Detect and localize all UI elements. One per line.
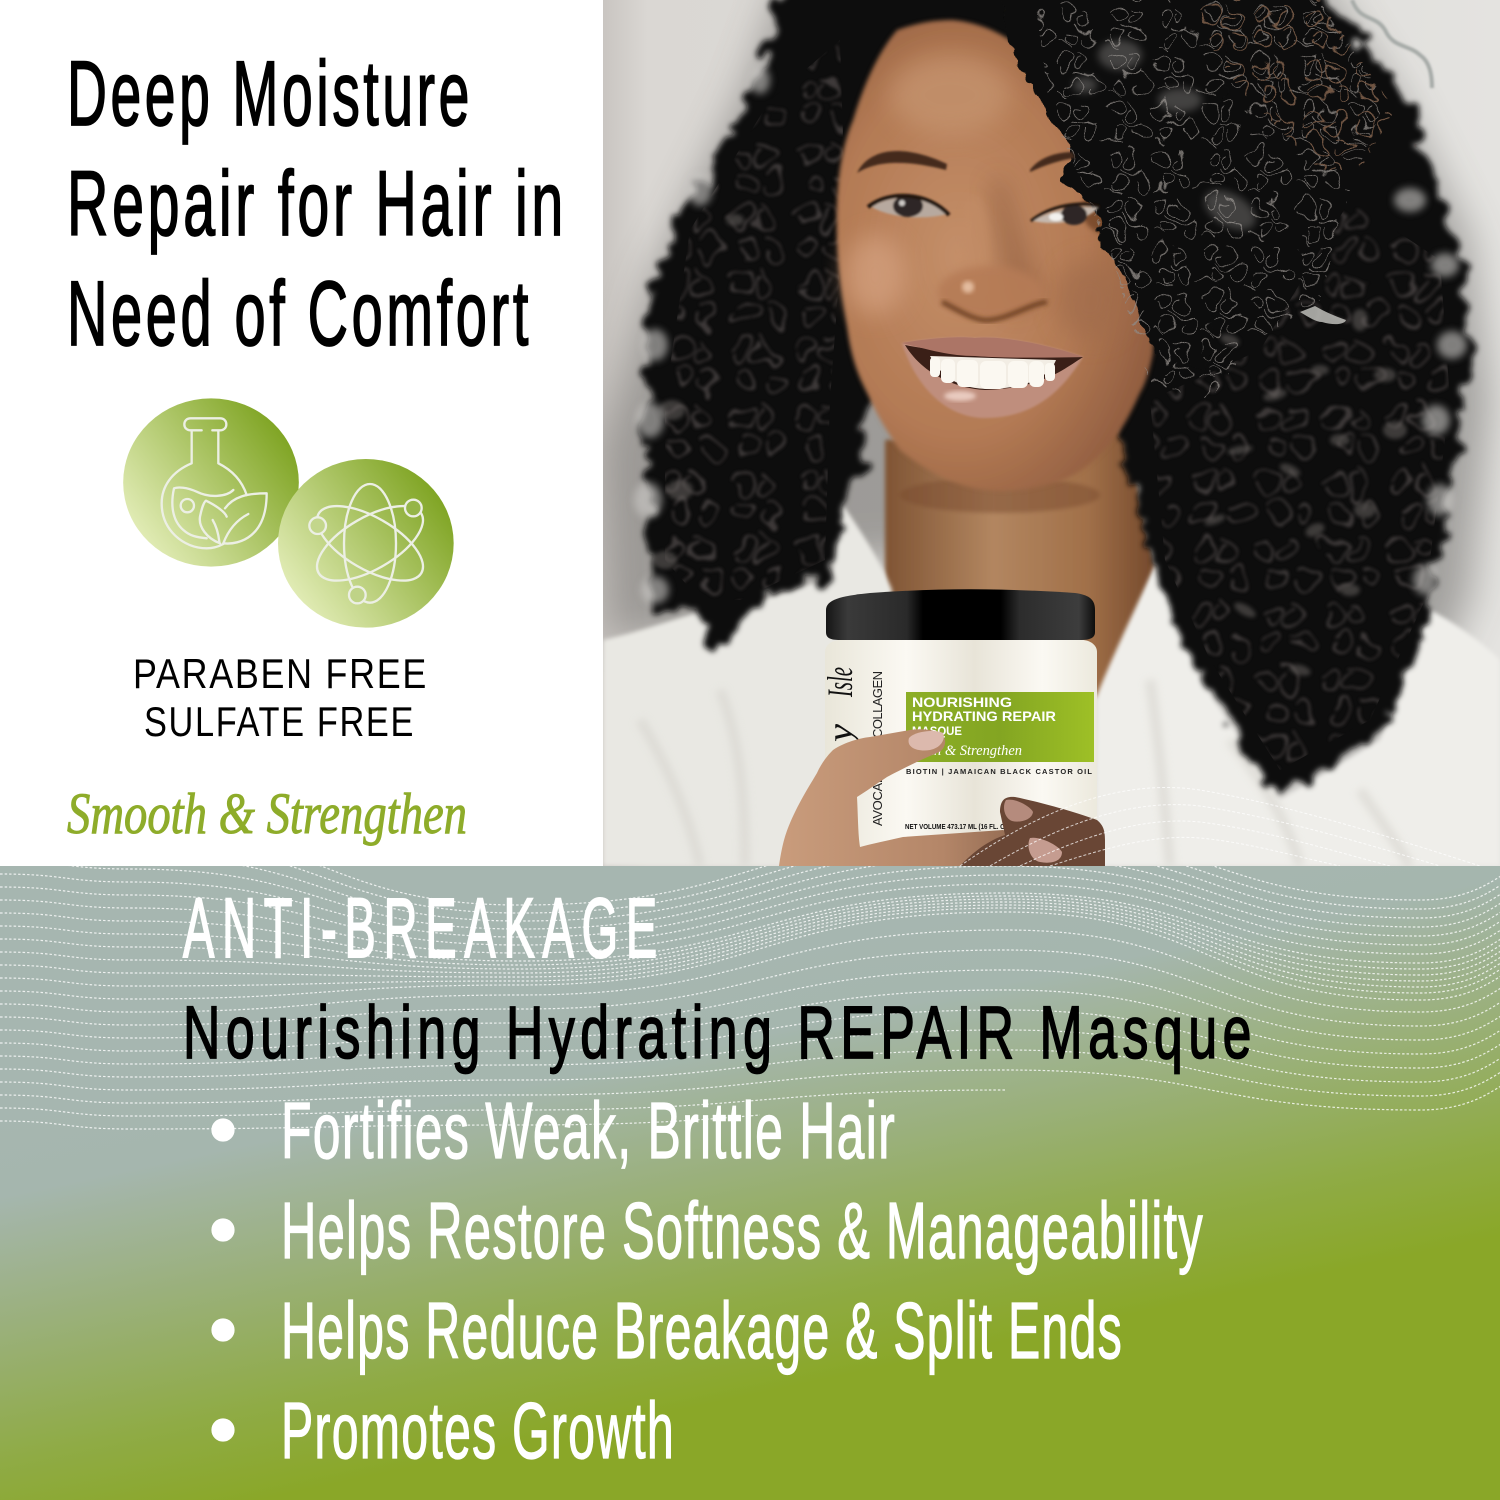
brown curls texture [1200, 0, 1392, 170]
jar green label: NOURISHING [912, 694, 1012, 710]
bullet 4 [212, 1386, 675, 1475]
bullet 1 [212, 1086, 896, 1175]
dim blurred curl texture [640, 30, 1470, 790]
smile [902, 337, 1083, 418]
icon: flask with leaves [123, 398, 299, 567]
flyaway curl [1352, 0, 1432, 88]
wave pattern [0, 866, 1500, 1130]
jar green label: th & Strengthen [930, 743, 1022, 759]
face [837, 20, 1160, 491]
jar lid [826, 589, 1095, 640]
heading [67, 43, 567, 365]
bullet 1: Fortifies Weak, Brittle Hair [281, 1086, 896, 1175]
jar body [825, 640, 1097, 848]
hair lock over face [1006, 34, 1163, 354]
jar net volume: NET VOLUME 473.17 ML (16 FL. O [905, 822, 1005, 831]
eyes [868, 195, 1100, 225]
bullet 3 [212, 1286, 1123, 1375]
fine curls texture [1036, 0, 1380, 398]
jar vertical text: Isle [820, 667, 860, 698]
grey highlights in hair [1073, 40, 1262, 238]
jar green label: MASQUE [912, 724, 962, 738]
jar vertical text: COLLAGEN [870, 671, 885, 738]
bottom gradient panel [0, 866, 1500, 1500]
left white panel [0, 0, 603, 866]
hair mass [644, 0, 1468, 797]
soft hair halo [603, 0, 1490, 790]
jar vertical text [827, 668, 882, 826]
nose [938, 267, 1049, 324]
product type heading: ANTI-BREAKAGE [183, 881, 665, 975]
jar ingredient line: BIOTIN | JAMAICAN BLACK CASTOR OIL [906, 767, 1092, 776]
icon: atom [278, 459, 454, 628]
bullet 4: Promotes Growth [281, 1386, 675, 1475]
heading: Repair for Hair in [67, 153, 567, 255]
hand holding jar [779, 729, 1105, 866]
jar vertical text: y [820, 724, 860, 745]
benefits list [212, 1086, 1204, 1475]
jar green label: HYDRATING REPAIR [912, 708, 1056, 724]
eyebrows [857, 151, 1075, 173]
dotted lines over robe [960, 787, 1480, 866]
neck and chest [885, 430, 1155, 700]
light gaps near outer hair [634, 66, 1467, 604]
claims: paraben and sulfate free: SULFATE FREE [144, 698, 415, 745]
heading: Need of Comfort [67, 263, 532, 365]
claims: paraben and sulfate free [133, 650, 428, 745]
claims: paraben and sulfate free: PARABEN FREE [133, 650, 428, 697]
blurred curls in lower hair [653, 214, 1407, 678]
robe folds [640, 680, 1410, 866]
small shiny curl [1300, 306, 1346, 324]
photo: woman with curly hair [603, 0, 1500, 866]
heading: Deep Moisture [67, 43, 473, 145]
jar vertical text: AVOCADO [870, 764, 885, 826]
jar green label [906, 692, 1094, 762]
robe [603, 505, 1500, 866]
photo background wall [603, 0, 1500, 866]
tagline: smooth and strengthen: Smooth & Strengthen [67, 781, 467, 846]
